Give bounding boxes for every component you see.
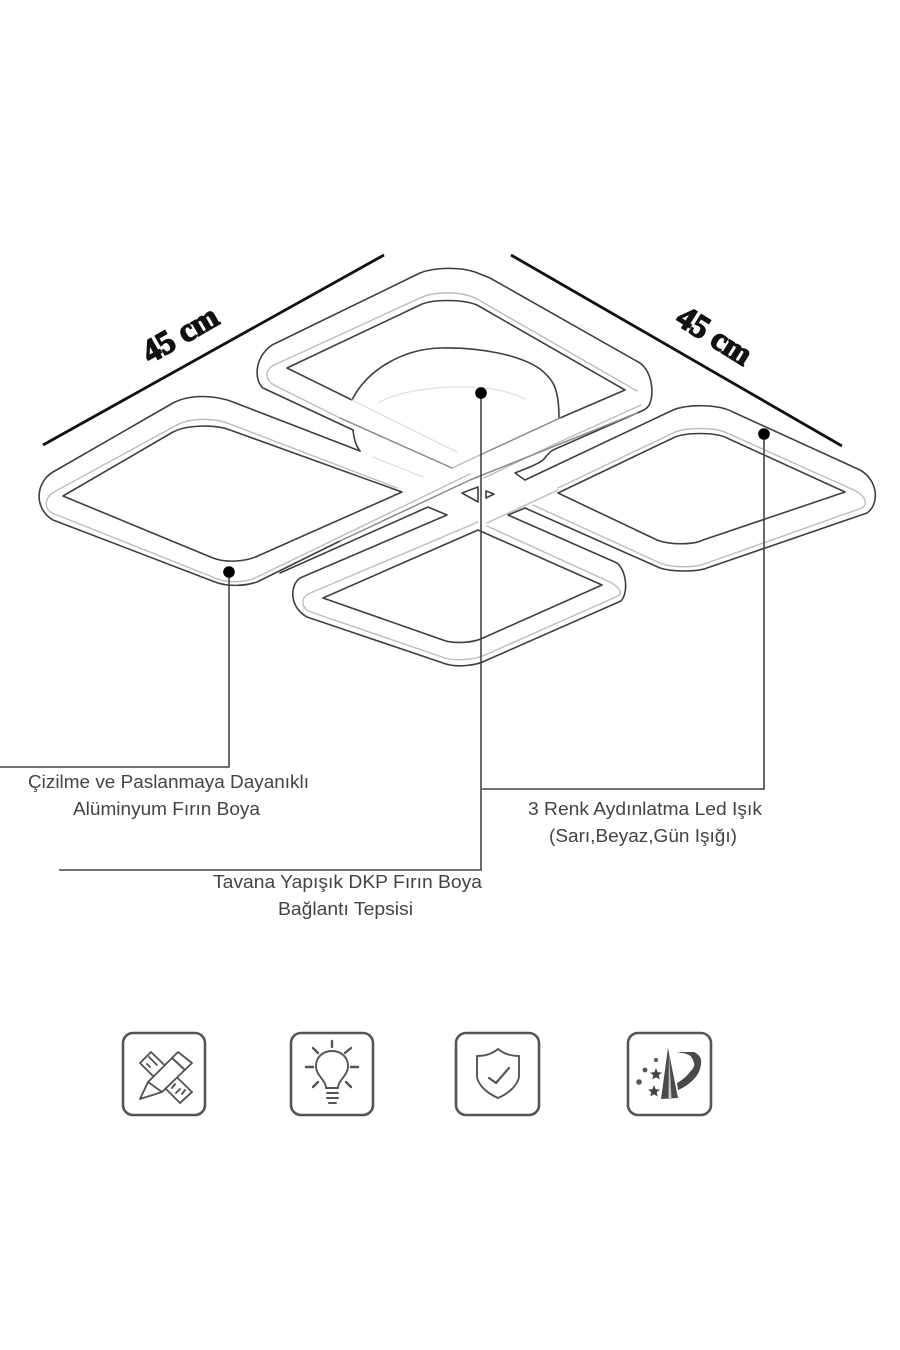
callout: mounting tray: Bağlantı Tepsisi <box>278 899 413 919</box>
callout: LED light: (Sarı,Beyaz,Gün Işığı) <box>549 826 737 846</box>
right panel <box>487 406 875 571</box>
callout: LED light <box>482 428 770 846</box>
central hub <box>352 348 559 451</box>
callout: aluminium paint: Çizilme ve Paslanmaya Dayanıklı <box>28 772 309 792</box>
callout: aluminium paint <box>0 566 309 819</box>
centre triangles <box>462 487 494 502</box>
callout: mounting tray: Tavana Yapışık DKP Fırın Boya <box>213 872 483 892</box>
callout: LED light: 3 Renk Aydınlatma Led Işık <box>528 799 763 819</box>
icon: light bulb <box>291 1033 373 1115</box>
icon: anti-scratch P with stars <box>628 1033 711 1115</box>
dimension: right 45 cm <box>511 255 842 446</box>
dimension: right 45 cm: 45 cm <box>670 299 758 373</box>
icon: pencil and ruler <box>123 1033 205 1115</box>
icon: shield with check <box>456 1033 539 1115</box>
ceiling lamp line drawing <box>39 268 875 666</box>
callout: aluminium paint: Alüminyum Fırın Boya <box>73 799 261 819</box>
dimension: left 45 cm <box>43 255 384 445</box>
top panel <box>257 268 652 480</box>
callout: mounting tray <box>59 387 487 919</box>
dimension: left 45 cm: 45 cm <box>136 299 225 371</box>
left panel <box>39 396 637 585</box>
bottom panel <box>280 507 626 666</box>
